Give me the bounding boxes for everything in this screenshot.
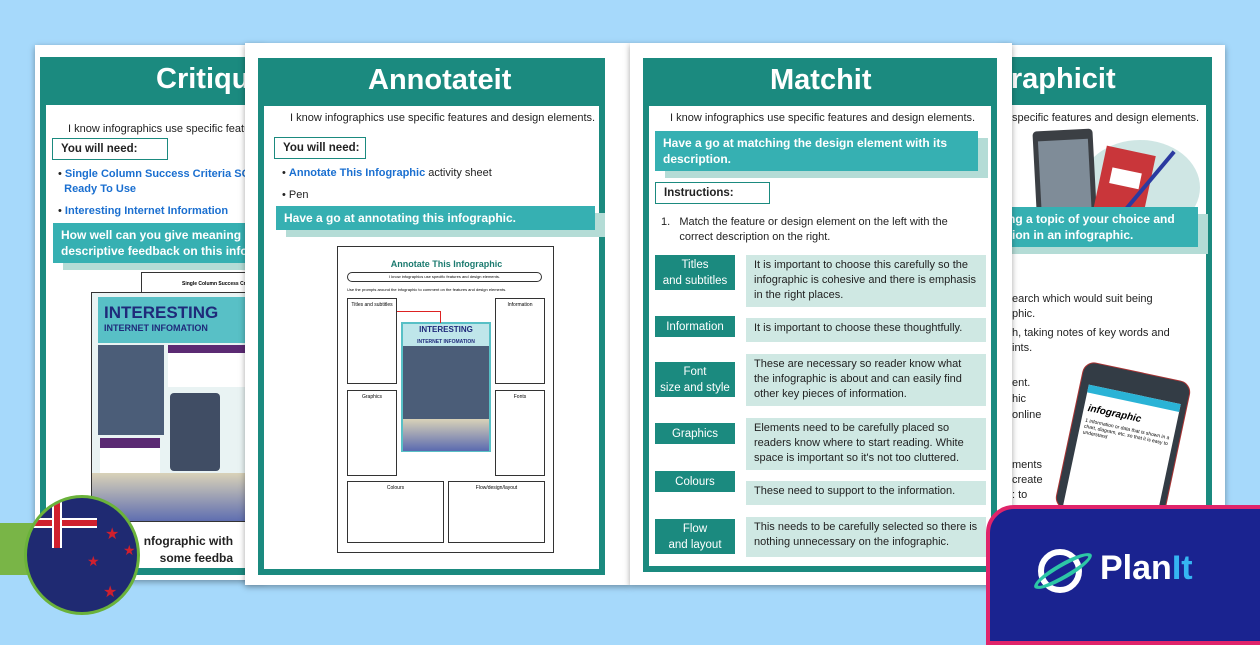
sheet: Matchit: This needs to be carefully selected so there is nothing unnecessary on the infographic.	[754, 521, 977, 548]
row: flow	[655, 519, 735, 554]
image: annotate worksheet	[337, 246, 554, 553]
title: Critiqueit: Critiqueit	[156, 63, 283, 95]
title: Annotateit: Annotateit	[368, 64, 511, 96]
sheet: Infographicit: : to	[1012, 489, 1027, 501]
text: learning objective: I know infographics use specific features	[68, 123, 266, 135]
callout: task: Have a go at matching the design element with its	[663, 136, 947, 150]
list: resources	[58, 168, 250, 195]
title: Infographicit: Infographicit	[940, 63, 1116, 95]
row: font: size and style	[660, 382, 730, 394]
title: Matchit: Matchit	[770, 64, 872, 96]
image: interesting internet infographic: INTERESTING	[104, 303, 218, 322]
icon: NZ flag badge: ★	[105, 526, 119, 543]
callout: question: descriptive feedback on this info	[61, 244, 248, 258]
icon: planet check	[1038, 549, 1082, 593]
image: interesting internet infographic	[91, 292, 261, 522]
sheet: Infographicit: online	[1012, 409, 1041, 421]
callout: task	[655, 131, 978, 171]
list: resources: • Annotate This Infographic activity sheet	[282, 167, 492, 179]
text: objective: I know infographics use specific features and design elements.	[670, 112, 975, 124]
callout: question: How well can you give meaning	[61, 228, 241, 242]
row: information	[655, 316, 735, 337]
image: interesting internet infographic: INTERNET INFOMATION	[104, 323, 208, 333]
image: annotate worksheet: Information	[507, 302, 532, 308]
text: critique bottom	[144, 534, 234, 565]
text: PlanIt: PlanIt	[1100, 549, 1193, 587]
sheet: Annotateit: • Pen	[282, 189, 308, 201]
image: annotate worksheet: Fonts	[514, 394, 526, 400]
row: font: Font	[683, 366, 706, 378]
sheet: Infographicit: ent.	[1012, 377, 1030, 389]
row: colours	[655, 471, 735, 492]
callout: task: tion in an infographic.	[1008, 228, 1133, 242]
row: flow: and layout	[668, 538, 722, 550]
illustration: phone	[1054, 360, 1192, 530]
list: resources: • Single Column Success Criteria SC	[58, 168, 250, 180]
callout: task: ng a topic of your choice and	[1008, 212, 1175, 226]
image: annotate worksheet: Annotate This Infographic	[391, 259, 502, 269]
text: objective: specific features and design elements.	[1012, 112, 1199, 124]
row: font	[655, 362, 735, 397]
sheet: Matchit: These need to support to the information.	[754, 485, 955, 497]
box: you will need: You will need:	[283, 142, 359, 154]
image: success criteria sheet	[141, 272, 271, 312]
sheet: Infographicit: ints.	[1012, 342, 1032, 354]
decoration: green bar	[0, 523, 60, 575]
sheet: Infographicit	[1000, 45, 1225, 580]
callout: question	[53, 223, 273, 263]
row: graphics	[655, 423, 735, 444]
illustration: phone: 1 information or data that is shown in a chart, diagram, etc. so that it is easy to understand	[1082, 418, 1170, 447]
sheet: Critiqueit	[35, 45, 265, 580]
image: annotate worksheet: Flow/design/layout	[476, 485, 517, 491]
row: titles	[655, 255, 735, 290]
image: annotate worksheet: Colours	[387, 485, 404, 491]
sheet: Matchit	[630, 43, 1012, 585]
callout: task: description.	[663, 152, 731, 166]
text: steps: earch which would suit being	[1012, 293, 1153, 305]
image: annotate worksheet: INTERESTING	[419, 325, 473, 334]
list: resources: Ready To Use	[64, 183, 136, 195]
sheet: Matchit: Elements need to be carefully placed so readers know where to start reading. White space is important so it's not too cluttered.	[754, 422, 964, 464]
text: instruction step: correct description on the right.	[679, 231, 830, 243]
sheet: Matchit: It is important to choose these thoughtfully.	[754, 322, 962, 334]
box: instructions	[655, 182, 770, 204]
callout: task	[276, 206, 595, 230]
text: steps	[1012, 293, 1153, 320]
row: information: Information	[666, 320, 724, 332]
row: graphics: Graphics	[672, 428, 718, 440]
box: instructions: Instructions:	[664, 187, 734, 199]
sheet: Infographicit: ments	[1012, 459, 1042, 471]
image: success criteria sheet: Single Column Success Cri	[182, 281, 247, 287]
image: annotate worksheet: INTERNET INFOMATION	[417, 339, 475, 345]
text: objective: I know infographics use specific features and design elements.	[290, 112, 595, 124]
image: annotate worksheet: Titles and subtitles	[351, 302, 393, 308]
text: critique bottom: nfographic with	[144, 534, 233, 548]
image: annotate worksheet: Graphics	[362, 394, 382, 400]
row: colours: Colours	[675, 476, 715, 488]
icon: NZ flag badge: ★	[87, 553, 100, 569]
box: you will need: You will need:	[61, 143, 137, 155]
text: instruction step	[661, 216, 948, 243]
icon: NZ flag badge: ★	[103, 584, 117, 601]
sheet: Annotateit	[245, 43, 630, 585]
illustration: tablet and notebook	[1032, 128, 1200, 207]
text: steps: phic.	[1012, 308, 1035, 320]
sheet: Infographicit: hic	[1012, 393, 1026, 405]
sheet: Matchit: These are necessary so reader know what the infographic is about and can easily find other key pieces of information.	[754, 358, 962, 400]
text: critique bottom: some feedba	[160, 551, 233, 565]
image: annotate worksheet: I know infographics use specific features and design elements.	[389, 274, 500, 279]
sheet: Infographicit: create	[1012, 474, 1043, 486]
callout: task: Have a go at annotating this infographic.	[284, 211, 516, 225]
sheet: Infographicit: h, taking notes of key words and	[1012, 327, 1170, 339]
text: instruction step: 1. Match the feature or design element on the left with the	[661, 216, 948, 228]
icon: NZ flag badge	[24, 495, 140, 615]
box: you will need	[274, 137, 366, 159]
row: titles: Titles	[681, 258, 709, 270]
callout: task	[1000, 207, 1198, 247]
sheet: Critiqueit: • Interesting Internet Information	[58, 205, 228, 217]
icon: NZ flag badge: ★	[123, 542, 136, 558]
row: titles: and subtitles	[663, 274, 727, 286]
illustration: phone: infographic	[1087, 403, 1142, 425]
sheet: Matchit: It is important to choose this carefully so the infographic is cohesive and there is emphasis in the right places.	[754, 259, 976, 301]
image: annotate worksheet: Use the prompts around the infographic to comment on the features and design elements.	[347, 287, 506, 292]
badge: PlanIt logo	[986, 505, 1260, 645]
row: flow: Flow	[683, 522, 707, 534]
box: you will need	[52, 138, 168, 160]
